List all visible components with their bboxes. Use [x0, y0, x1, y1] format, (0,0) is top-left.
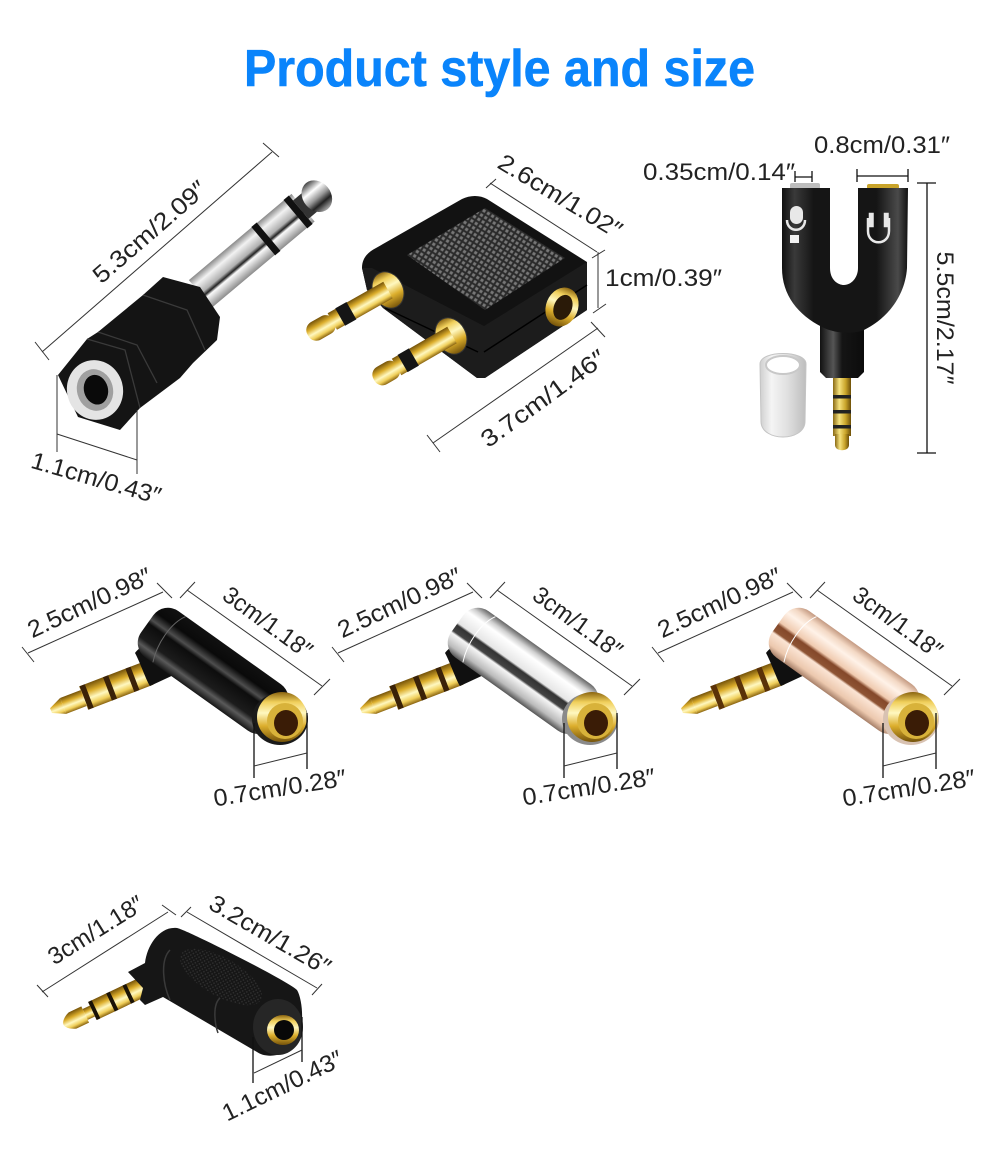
icon: front face highlight	[362, 262, 587, 378]
icon: body contour	[164, 950, 220, 1033]
icon: gold plug	[356, 661, 463, 722]
icon: twin gold plug front	[369, 326, 457, 389]
dimension: arm width: 0.8cm/0.31″	[814, 132, 951, 159]
dimension: barrel length	[810, 581, 960, 695]
icon: gold plug	[46, 661, 153, 722]
dimension: diameter: 1.1cm/0.43″	[28, 447, 165, 510]
dimension: plug width: 2.5cm/0.98″	[23, 562, 157, 644]
icon: gold plug	[677, 661, 784, 722]
dimension: barrel length: 3cm/1.18″	[217, 581, 318, 665]
dimension: socket diameter	[521, 713, 658, 811]
dimension: socket diameter: 1.1cm/0.43″	[218, 1045, 348, 1127]
icon: stem	[445, 640, 488, 686]
dimension: height	[593, 252, 723, 313]
dimension: height	[917, 183, 958, 453]
icon: barrel	[762, 601, 927, 741]
panel: black right-angle adapter	[22, 562, 349, 812]
dimension: small jack: 0.35cm/0.14″	[643, 159, 796, 186]
icon: gold plug	[59, 978, 147, 1034]
dimension: arm width	[814, 132, 951, 182]
dimension: socket diameter	[212, 713, 349, 812]
dimension: barrel length: 3cm/1.18″	[527, 581, 628, 665]
icon: seam lines	[385, 285, 587, 352]
dimension: body length: 3.2cm/1.26″	[204, 890, 336, 981]
icon: stem	[135, 640, 178, 686]
icon: body	[128, 928, 302, 1056]
dimension: plug width: 2.5cm/0.98″	[653, 562, 787, 644]
panel: rose gold right-angle adapter	[652, 562, 978, 812]
dimension: length: 3.7cm/1.46″	[476, 344, 612, 453]
dimension: plug width	[37, 890, 176, 997]
dimension: length: 5.3cm/2.09″	[88, 175, 213, 289]
dimension: socket diameter: 0.7cm/0.28″	[841, 765, 978, 812]
dimension: barrel length	[180, 581, 330, 695]
dimension: body length	[181, 890, 336, 995]
panel: Y splitter adapter	[643, 132, 958, 453]
dimension: width: 2.6cm/1.02″	[493, 149, 627, 244]
icon: gold socket	[252, 692, 308, 745]
icon: gold socket	[883, 692, 939, 745]
panel: airplane twin plug adapter	[303, 149, 723, 453]
dimension: length	[35, 143, 279, 360]
dimension: plug width	[22, 562, 172, 662]
icon: gold jack	[540, 282, 584, 332]
icon: black hex body	[58, 277, 220, 430]
icon: stem	[766, 640, 809, 686]
icon: rear collar	[366, 266, 410, 314]
dimension: plug width	[652, 562, 802, 662]
dimension: length	[427, 322, 612, 453]
icon: grip panel	[172, 938, 270, 1016]
icon: plug neck	[820, 322, 864, 378]
icon: textured panel	[407, 208, 565, 310]
title: Product style and size	[244, 40, 755, 98]
icon: gold jack top	[867, 184, 899, 189]
dimension: plug width: 2.5cm/0.98″	[333, 562, 467, 644]
icon: clear sleeve	[760, 354, 806, 437]
icon: gold 4-pole plug	[833, 378, 851, 450]
panel: matte black right-angle adapter	[37, 890, 348, 1127]
dimension: height: 5.5cm/2.17″	[931, 252, 958, 385]
icon: metal plug shaft	[189, 173, 339, 308]
icon: silver jack opening	[60, 354, 130, 426]
icon: headset symbol	[868, 214, 889, 242]
icon: gold socket	[562, 692, 618, 745]
dimension: plug width: 3cm/1.18″	[43, 890, 149, 971]
icon: front collar	[429, 312, 473, 360]
dimension: diameter	[28, 375, 165, 510]
icon: silver jack top	[790, 183, 820, 189]
dimension: barrel length	[490, 581, 640, 695]
icon: airplane adapter body	[362, 196, 587, 378]
panel: 6.35mm plug to 3.5mm jack adapter	[28, 143, 339, 510]
icon: microphone symbol	[787, 206, 805, 243]
icon: gold socket	[253, 999, 303, 1055]
dimension: height: 1cm/0.39″	[605, 265, 723, 292]
icon: twin gold plug rear	[303, 281, 393, 344]
icon: body facets	[87, 295, 205, 408]
dimension: plug width	[332, 562, 482, 662]
dimension: barrel length: 3cm/1.18″	[847, 581, 948, 665]
panel: silver right-angle adapter	[332, 562, 658, 811]
icon: barrel	[131, 601, 296, 741]
icon: barrel	[441, 601, 606, 741]
dimension: socket diameter: 0.7cm/0.28″	[521, 764, 658, 811]
icon: U shaped body	[782, 188, 908, 333]
dimension: socket diameter	[841, 713, 978, 812]
dimension: socket diameter: 0.7cm/0.28″	[212, 765, 349, 812]
